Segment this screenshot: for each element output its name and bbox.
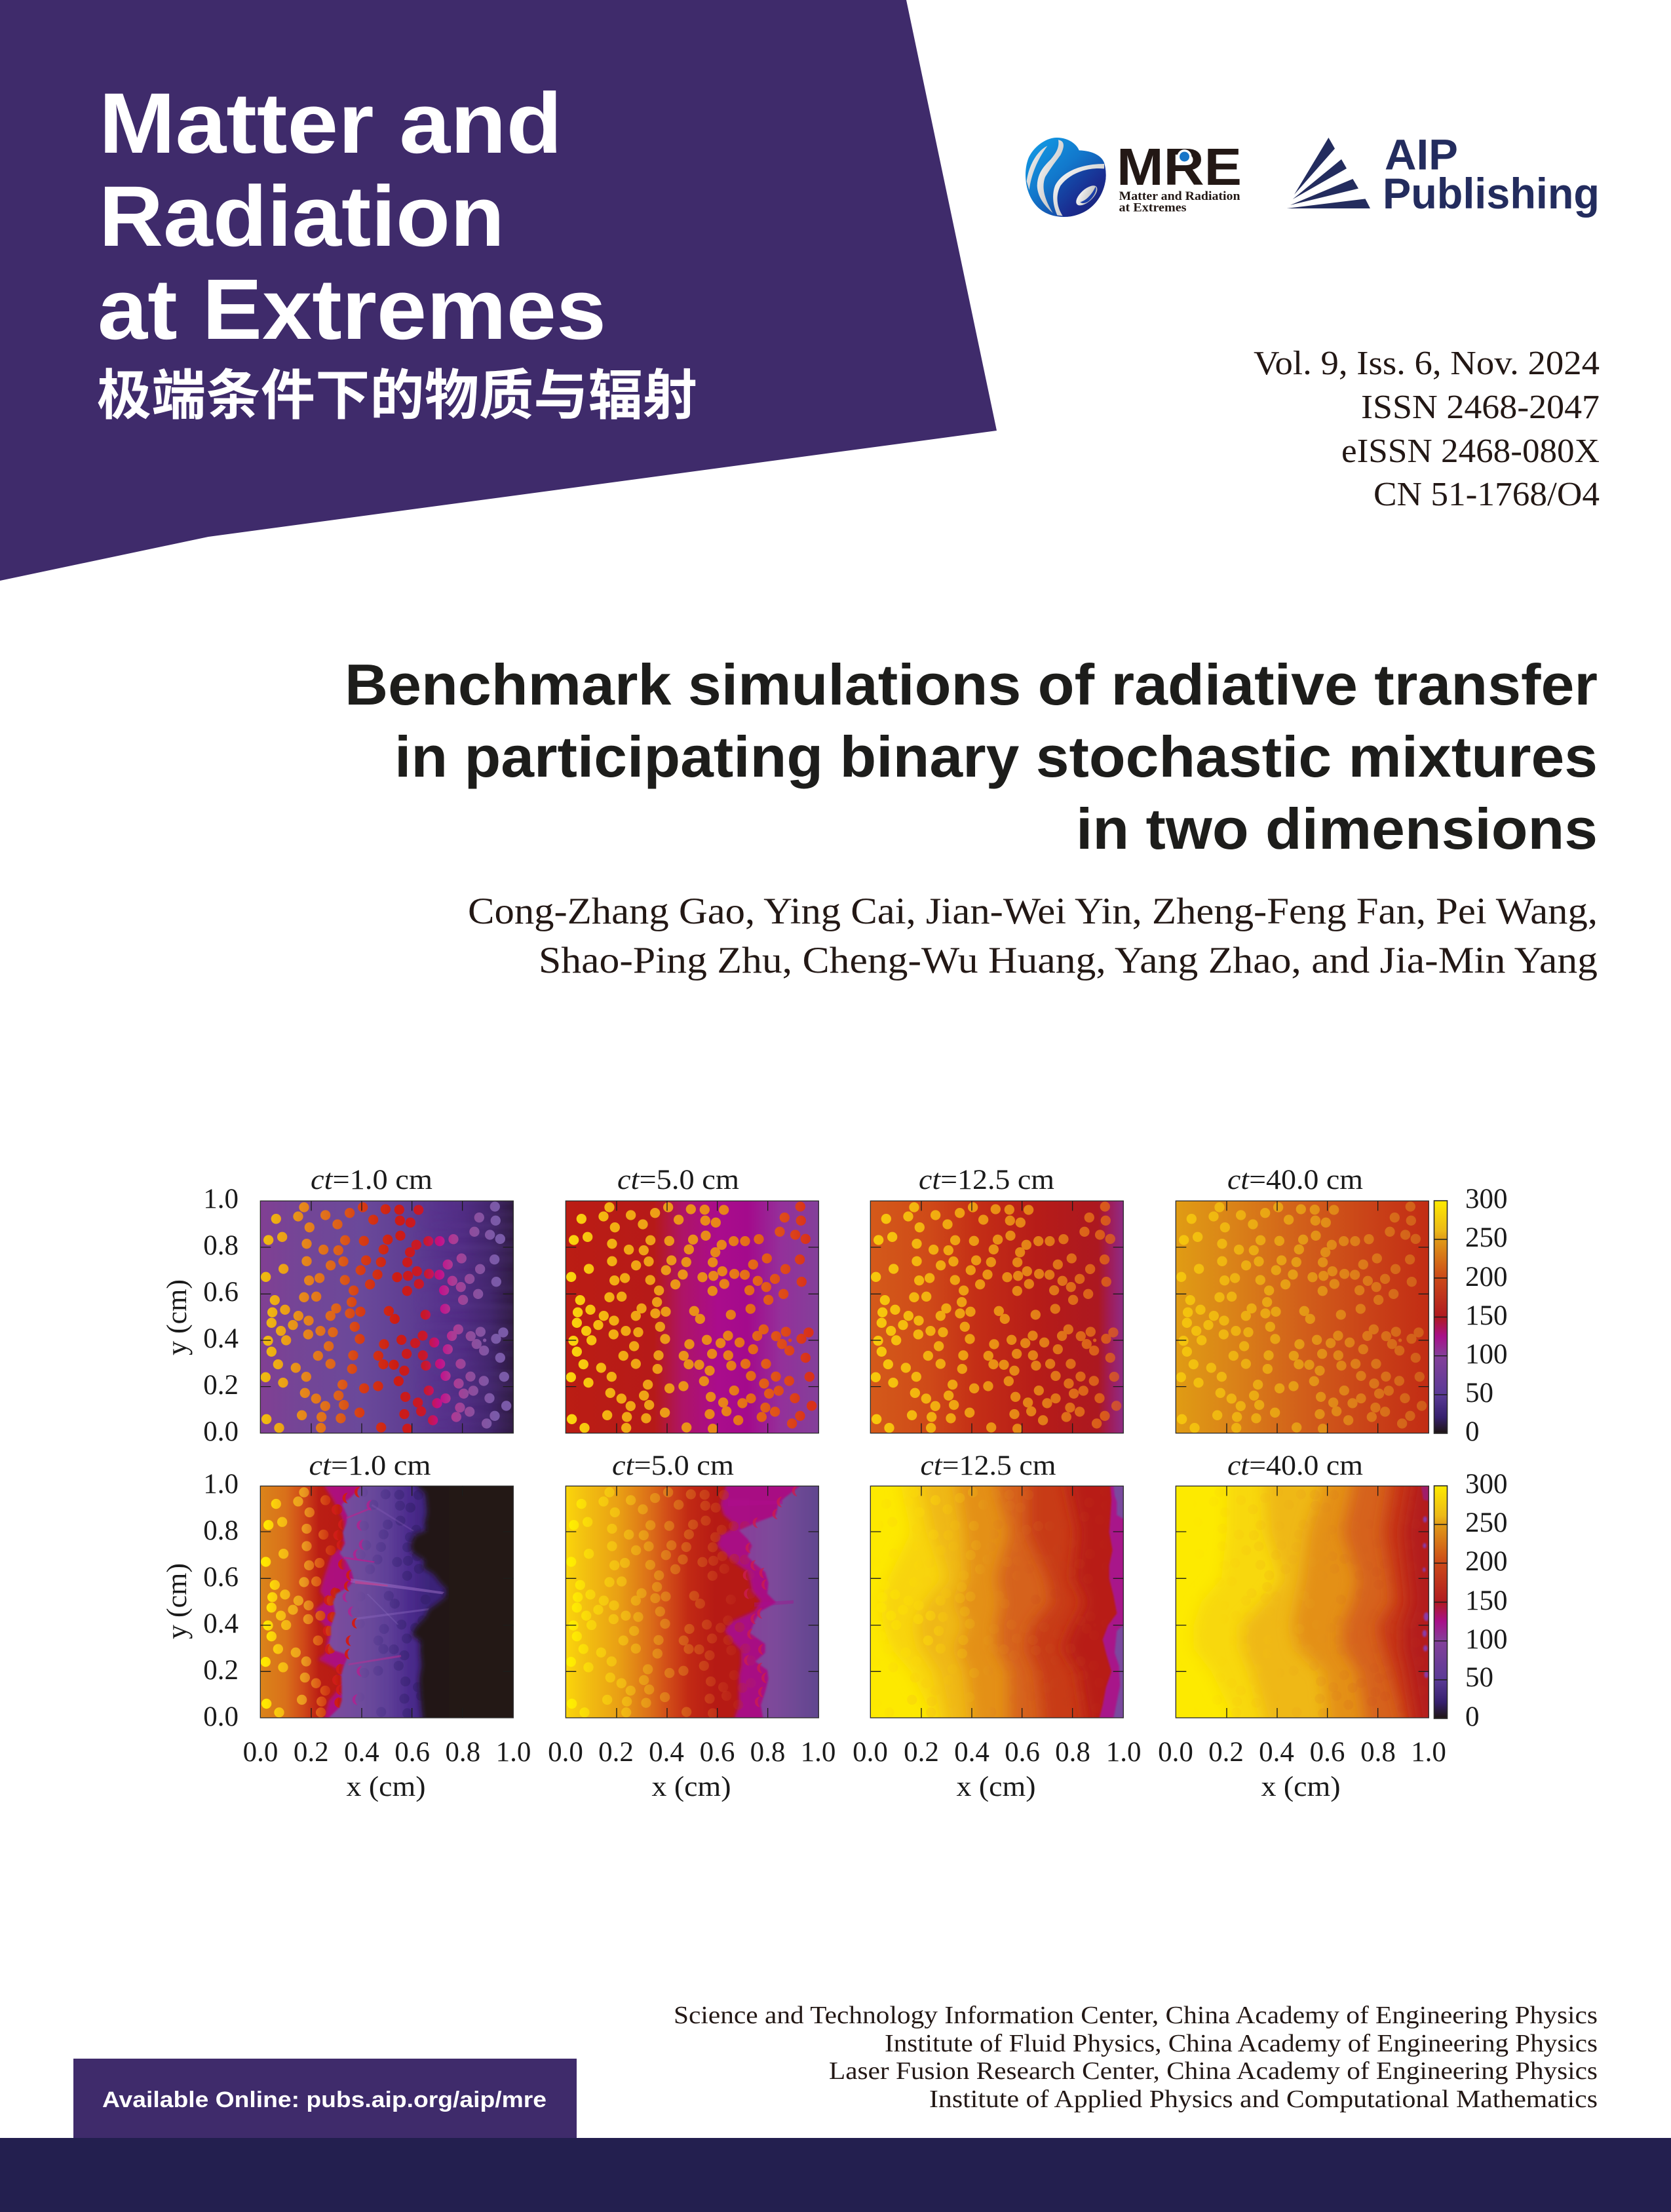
panel titles bottom row: ct=12.5 cm [920, 1450, 1056, 1481]
affiliations: Science and Technology Information Center, China Academy of Engineering Physics [674, 2002, 1598, 2029]
y axis tick labels bottom row: 0.0 [203, 1701, 239, 1732]
panel titles bottom row: ct=1.0 cm [309, 1450, 431, 1481]
x axis tick labels: 0.2 [294, 1737, 329, 1768]
colorbar labels bottom: 200 [1465, 1546, 1507, 1577]
icon: MRE sphere [1026, 138, 1106, 217]
heat map background [260, 1201, 513, 1433]
x axis tick labels: 0.6 [700, 1737, 735, 1768]
heat map with contour bands [1176, 1456, 1474, 1751]
panel titles bottom row: ct=40.0 cm [1227, 1450, 1363, 1481]
purple header banner [0, 0, 997, 581]
x axis tick labels: 0.0 [243, 1737, 278, 1768]
panel titles top row: ct=40.0 cm [1227, 1165, 1363, 1195]
particles [1176, 1201, 1427, 1434]
issue information: Vol. 9, Iss. 6, Nov. 2024 [1254, 345, 1600, 382]
x axis tick labels: 0.2 [1208, 1737, 1244, 1768]
affiliations: Institute of Applied Physics and Computational Mathematics [929, 2086, 1598, 2113]
issue information: ISSN 2468-2047 [1361, 389, 1600, 426]
x axis tick labels: 1.0 [1106, 1737, 1141, 1768]
MRE sub-wordmark [1119, 190, 1240, 215]
colorbar labels bottom: 250 [1465, 1507, 1507, 1538]
colorbar bottom [1434, 1486, 1447, 1718]
authors: Cong-Zhang Gao, Ying Cai, Jian-Wei Yin, Zheng-Feng Fan, Pei Wang, [468, 891, 1598, 932]
x axis tick labels: 0.8 [750, 1737, 785, 1768]
y axis tick labels bottom row: 0.6 [203, 1562, 239, 1593]
Chinese journal title: 极端条件下的物质与辐射 [97, 365, 697, 426]
x axis tick labels: 0.4 [649, 1737, 684, 1768]
panel: top row ct=1.0 cm [260, 1201, 513, 1434]
x axis labels: x (cm) [346, 1772, 426, 1802]
heat map background [1176, 1201, 1429, 1433]
y axis tick labels bottom row: 0.8 [203, 1515, 239, 1546]
colorbar labels bottom: 0 [1465, 1701, 1480, 1732]
particles [871, 1201, 1121, 1434]
issue information: eISSN 2468-080X [1341, 433, 1600, 470]
panel titles bottom row: ct=5.0 cm [612, 1450, 734, 1481]
x axis tick labels: 0.8 [1360, 1737, 1396, 1768]
colorbar labels top: 100 [1465, 1339, 1507, 1370]
icon: blue dot in R [1177, 149, 1191, 164]
x axis tick labels: 1.0 [1411, 1737, 1446, 1768]
panel: bottom row ct=1.0 cm [259, 1485, 514, 1718]
colorbar labels bottom: 300 [1465, 1469, 1507, 1500]
heat map with contour bands [870, 1456, 1168, 1751]
colorbar labels bottom: 50 [1465, 1662, 1493, 1693]
issue information: CN 51-1768/O4 [1373, 476, 1600, 513]
y axis tick labels top row [203, 1184, 239, 1447]
AIP wordmark [1383, 130, 1600, 218]
AIP wordmark: AIP [1385, 130, 1458, 178]
x axis tick labels: 1.0 [496, 1737, 531, 1768]
panel titles top row: ct=5.0 cm [617, 1165, 739, 1195]
panel titles bottom row [309, 1450, 1363, 1481]
x axis tick labels: 1.0 [801, 1737, 836, 1768]
plot frame and ticks [260, 1486, 513, 1718]
x axis tick labels: 0.6 [1310, 1737, 1345, 1768]
x axis tick labels: 0.4 [1259, 1737, 1294, 1768]
x axis tick labels: 0.0 [548, 1737, 583, 1768]
colorbar labels bottom [1465, 1469, 1507, 1732]
panel: bottom row ct=5.0 cm [566, 1467, 864, 1740]
y axis tick labels top row: 0.0 [203, 1416, 239, 1447]
AIP Publishing logo [1287, 130, 1600, 218]
heat map background [870, 1201, 1123, 1433]
colorbar labels bottom: 100 [1465, 1624, 1507, 1655]
journal title: Matter and [99, 75, 562, 171]
plot frame and ticks [1176, 1201, 1429, 1433]
particles [261, 1201, 511, 1434]
x axis tick labels: 0.0 [853, 1737, 888, 1768]
plot frame and ticks [260, 1201, 513, 1433]
x axis tick labels: 0.2 [598, 1737, 634, 1768]
heat map background [566, 1201, 818, 1433]
y axis tick labels bottom row: 0.4 [203, 1608, 239, 1639]
plot frame and ticks [1176, 1486, 1429, 1718]
MRE wordmark: MRE [1117, 138, 1242, 196]
journal title: Radiation [99, 168, 505, 264]
article title: in participating binary stochastic mixtures [394, 724, 1598, 789]
plot frame and ticks [870, 1201, 1123, 1433]
colorbar labels top: 150 [1465, 1300, 1507, 1331]
online availability box: Available Online: pubs.aip.org/aip/mre [102, 2087, 547, 2112]
colorbar labels bottom: 150 [1465, 1585, 1507, 1616]
MRE logo [1026, 138, 1242, 217]
colorbar top [1434, 1201, 1447, 1433]
y axis tick labels top row: 0.8 [203, 1230, 239, 1261]
plot frame and ticks [870, 1486, 1123, 1718]
x axis tick labels: 0.4 [344, 1737, 379, 1768]
colorbar labels top: 200 [1465, 1262, 1507, 1292]
y axis tick labels top row: 0.2 [203, 1370, 239, 1401]
AIP wordmark: Publishing [1383, 169, 1600, 218]
colorbar labels top: 0 [1465, 1416, 1480, 1447]
icon: AIP fan [1287, 138, 1370, 208]
colorbar labels top: 50 [1465, 1378, 1493, 1408]
y axis tick labels top row: 1.0 [203, 1184, 239, 1214]
issue information [1254, 345, 1600, 513]
particles [566, 1201, 816, 1434]
article title: Benchmark simulations of radiative transfer [345, 652, 1598, 717]
x axis tick labels [243, 1737, 1446, 1768]
x axis tick labels: 0.4 [954, 1737, 989, 1768]
journal title: at Extremes [98, 261, 606, 357]
authors: Shao-Ping Zhu, Cheng-Wu Huang, Yang Zhao, and Jia-Min Yang [539, 940, 1598, 981]
panel: top row ct=5.0 cm [566, 1201, 818, 1434]
x axis labels [346, 1772, 1341, 1802]
MRE sub-wordmark: Matter and Radiation [1119, 190, 1240, 203]
colorbar labels top [1465, 1184, 1507, 1447]
affiliations: Laser Fusion Research Center, China Academy of Engineering Physics [829, 2057, 1598, 2085]
affiliations [674, 2002, 1598, 2113]
x axis labels: x (cm) [1261, 1772, 1341, 1802]
journal title [98, 75, 606, 357]
article title [345, 652, 1598, 861]
heat map with radiation front [260, 1467, 558, 1740]
plot frame and ticks [566, 1486, 818, 1718]
colorbar labels top: 300 [1465, 1184, 1507, 1214]
x axis tick labels: 0.0 [1158, 1737, 1193, 1768]
panel: bottom row ct=12.5 cm [870, 1456, 1168, 1751]
colorbar labels top: 250 [1465, 1222, 1507, 1253]
y axis tick labels top row: 0.4 [203, 1323, 239, 1354]
y axis label bottom row: y (cm) [162, 1563, 193, 1639]
y axis tick labels bottom row [203, 1469, 239, 1732]
footer bar [0, 2138, 1671, 2212]
y axis tick labels bottom row: 0.2 [203, 1655, 239, 1686]
panel titles top row: ct=1.0 cm [311, 1165, 432, 1195]
plot frame and ticks [566, 1201, 818, 1433]
article title: in two dimensions [1076, 796, 1598, 861]
x axis tick labels: 0.8 [445, 1737, 480, 1768]
x axis tick labels: 0.8 [1055, 1737, 1090, 1768]
panel titles top row: ct=12.5 cm [919, 1165, 1054, 1195]
heat map with radiation front [566, 1467, 864, 1740]
x axis tick labels: 0.6 [1005, 1737, 1040, 1768]
panel: top row ct=40.0 cm [1176, 1201, 1429, 1434]
MRE sub-wordmark: at Extremes [1119, 202, 1186, 215]
x axis tick labels: 0.6 [394, 1737, 430, 1768]
y axis label top row: y (cm) [162, 1279, 193, 1355]
x axis labels: x (cm) [957, 1772, 1035, 1802]
y axis tick labels bottom row: 1.0 [203, 1469, 239, 1500]
affiliations: Institute of Fluid Physics, China Academy of Engineering Physics [885, 2030, 1598, 2057]
x axis tick labels: 0.2 [904, 1737, 939, 1768]
authors [468, 891, 1598, 981]
x axis labels: x (cm) [651, 1772, 731, 1802]
y axis tick labels top row: 0.6 [203, 1277, 239, 1308]
panel titles top row [311, 1165, 1363, 1195]
panel: bottom row ct=40.0 cm [1176, 1456, 1474, 1751]
panel: top row ct=12.5 cm [870, 1201, 1123, 1434]
online availability box [73, 2059, 577, 2138]
